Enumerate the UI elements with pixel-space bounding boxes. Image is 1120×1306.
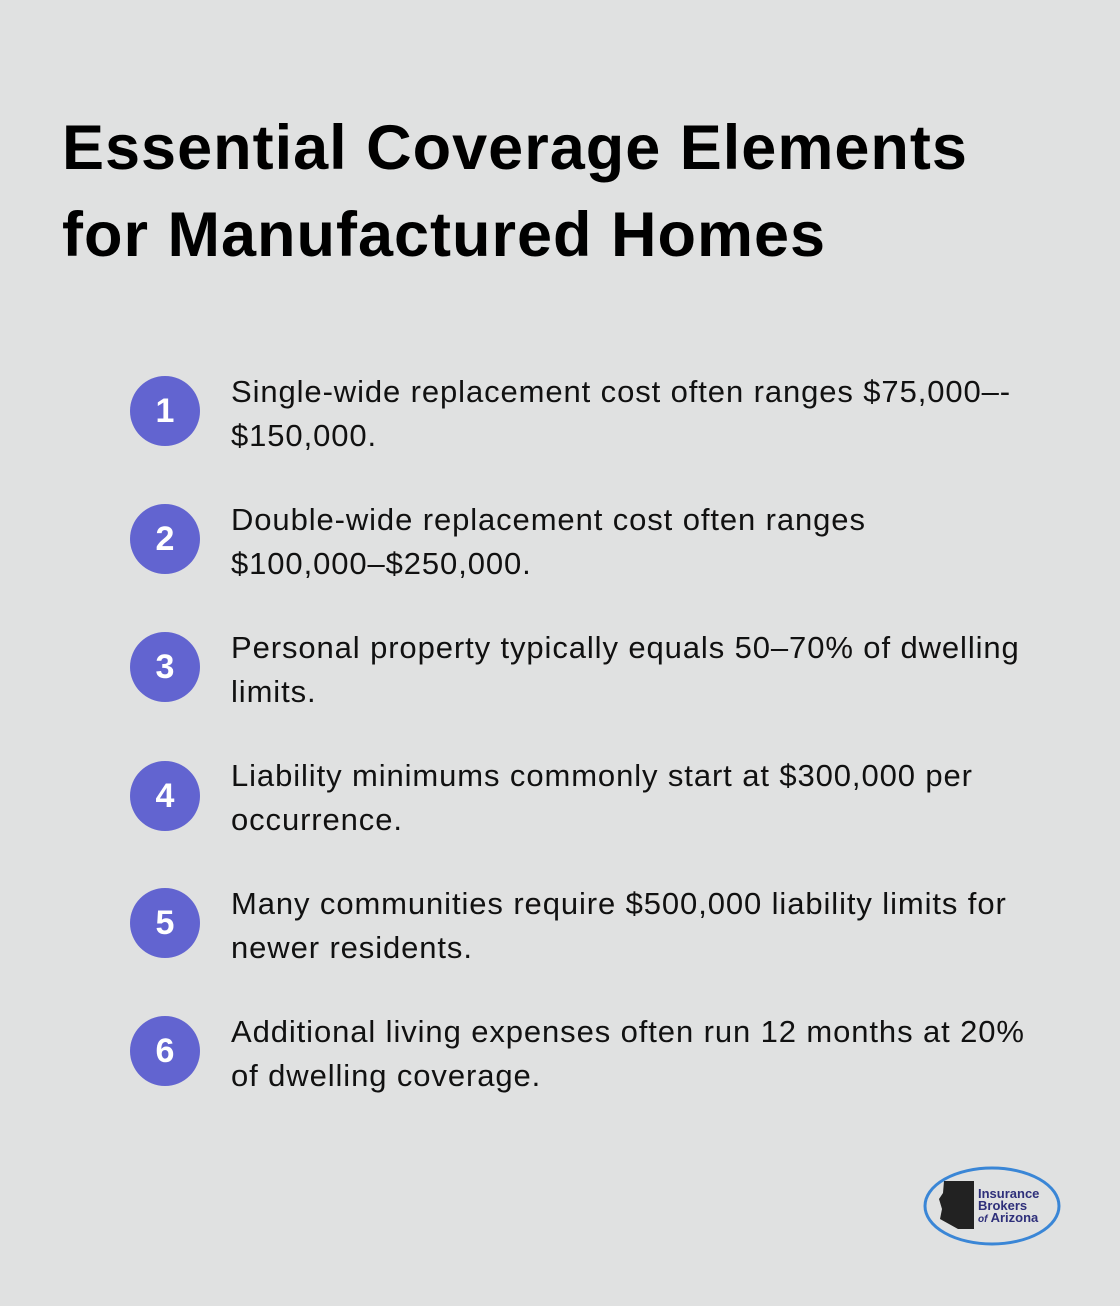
badge 6 — [130, 1016, 200, 1086]
title: Essential Coverage Elements — [62, 113, 968, 183]
text 2: $100,000–$250,000. — [231, 546, 532, 581]
item 5 — [130, 886, 1007, 965]
text 1: Single-wide replacement cost often ranges $75,000–- — [231, 374, 1011, 409]
text 1: $150,000. — [231, 418, 377, 453]
text 2 — [231, 502, 866, 581]
badge 5 — [130, 888, 200, 958]
item 3 — [130, 630, 1020, 709]
text 4: occurrence. — [231, 802, 403, 837]
badge 5: 5 — [156, 904, 174, 942]
text 4 — [231, 758, 973, 837]
badge 4 — [130, 761, 200, 831]
logo: Brokers — [978, 1198, 1027, 1213]
badge 6: 6 — [156, 1032, 174, 1070]
text 5: newer residents. — [231, 930, 473, 965]
text 6 — [231, 1014, 1025, 1093]
badge 2 — [130, 504, 200, 574]
item 2 — [130, 502, 866, 581]
badge 1 — [130, 376, 200, 446]
text 1 — [231, 374, 1011, 453]
badge 1: 1 — [156, 392, 174, 430]
text 3: limits. — [231, 674, 317, 709]
logo: Insurance — [978, 1186, 1039, 1201]
title — [62, 113, 968, 270]
text 6: Additional living expenses often run 12 months at 20% — [231, 1014, 1025, 1049]
text 4: Liability minimums commonly start at $300,000 per — [231, 758, 973, 793]
badge 2: 2 — [156, 520, 174, 558]
title: for Manufactured Homes — [62, 200, 826, 270]
text 6: of dwelling coverage. — [231, 1058, 541, 1093]
item 6 — [130, 1014, 1025, 1093]
logo: of Arizona — [978, 1210, 1039, 1225]
badge 3: 3 — [156, 648, 174, 686]
text 5: Many communities require $500,000 liability limits for — [231, 886, 1007, 921]
text 3 — [231, 630, 1020, 709]
text 2: Double-wide replacement cost often ranges — [231, 502, 866, 537]
text 3: Personal property typically equals 50–70% of dwelling — [231, 630, 1020, 665]
logo — [924, 1166, 1060, 1246]
badge 4: 4 — [156, 777, 174, 815]
text 5 — [231, 886, 1007, 965]
badge 3 — [130, 632, 200, 702]
item 1 — [130, 374, 1011, 453]
item 4 — [130, 758, 973, 837]
